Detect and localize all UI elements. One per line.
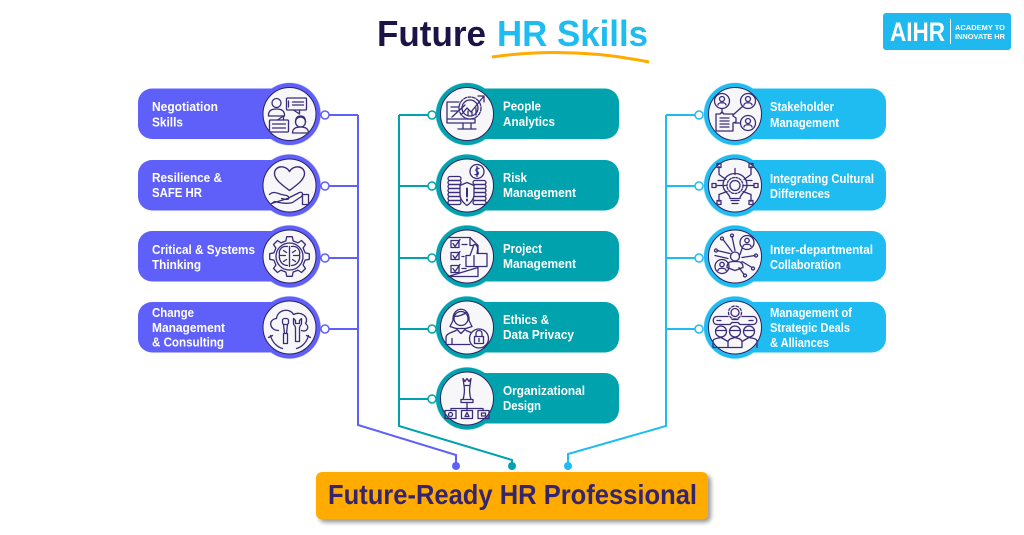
skill: Inter-departmental Collaboration xyxy=(704,226,886,288)
connector: purple column xyxy=(321,111,460,470)
title underline xyxy=(492,53,649,62)
skill: Organizational Design: Organizational xyxy=(503,384,585,398)
logo: AIHR: ACADEMY TO xyxy=(955,23,1005,32)
skill: Ethics & Data Privacy: Data Privacy xyxy=(503,328,574,342)
skill: Risk Management: Risk xyxy=(503,171,527,185)
skill: Resilience & SAFE HR xyxy=(138,154,320,216)
skill: Change Management & Consulting: Change xyxy=(152,306,194,320)
skill: Organizational Design: Design xyxy=(503,399,541,413)
title: HR Skills xyxy=(497,13,648,54)
skill: Integrating Cultural Differences: Differences xyxy=(770,187,830,201)
skill: Stakeholder Management: Stakeholder xyxy=(770,100,834,114)
skill: Management of Strategic Deals & Alliances: Management of xyxy=(770,306,853,320)
skill: Risk Management xyxy=(436,154,619,216)
skill: Stakeholder Management xyxy=(704,83,886,145)
skill: Integrating Cultural Differences xyxy=(704,154,886,216)
skill: Project Management xyxy=(436,226,619,288)
skill: Stakeholder Management: Management xyxy=(770,116,840,130)
skill: Critical & Systems Thinking: Thinking xyxy=(152,258,201,272)
title xyxy=(377,13,648,54)
skill: Resilience & SAFE HR: Resilience & xyxy=(152,171,222,185)
connector: blue column xyxy=(564,111,703,470)
skill: Management of Strategic Deals & Alliances: & Alliances xyxy=(770,336,829,350)
skill: Resilience & SAFE HR: SAFE HR xyxy=(152,186,202,200)
skill: Organizational Design xyxy=(436,368,619,430)
banner: Future-Ready HR Professional xyxy=(316,472,708,520)
banner: Future-Ready HR Professional: Future-Ready HR Professional xyxy=(328,479,697,510)
skill: People Analytics: People xyxy=(503,100,541,114)
skill: People Analytics: Analytics xyxy=(503,115,555,129)
skill: Change Management & Consulting: & Consulting xyxy=(152,336,224,350)
skill: Inter-departmental Collaboration: Inter-departmental xyxy=(770,243,873,257)
skill: Management of Strategic Deals & Alliances: Strategic Deals xyxy=(770,321,850,335)
logo: AIHR: AIHR xyxy=(890,17,945,47)
title: Future xyxy=(377,13,486,54)
skill: Integrating Cultural Differences: Integrating Cultural xyxy=(770,172,874,186)
skill: People Analytics xyxy=(436,83,619,145)
skill: Critical & Systems Thinking: Critical & Systems xyxy=(152,243,255,257)
connector: teal column xyxy=(399,111,516,470)
skill: Negotiation Skills: Negotiation xyxy=(152,100,218,114)
skill: Management of Strategic Deals & Alliances xyxy=(704,296,886,358)
skill: Change Management & Consulting: Management xyxy=(152,321,226,335)
logo: AIHR xyxy=(883,13,1011,50)
skill: Project Management: Management xyxy=(503,257,577,271)
skill: Project Management: Project xyxy=(503,242,543,256)
skill: Change Management & Consulting xyxy=(138,296,320,358)
logo: AIHR: INNOVATE HR xyxy=(955,32,1006,41)
skill: Critical & Systems Thinking xyxy=(138,226,320,288)
skill: Inter-departmental Collaboration: Collaboration xyxy=(770,258,841,272)
skill: Risk Management: Management xyxy=(503,186,577,200)
skill: Negotiation Skills xyxy=(138,83,320,145)
skill: Ethics & Data Privacy xyxy=(436,296,619,358)
skill: Ethics & Data Privacy: Ethics & xyxy=(503,313,549,327)
skill: Negotiation Skills: Skills xyxy=(152,116,183,130)
